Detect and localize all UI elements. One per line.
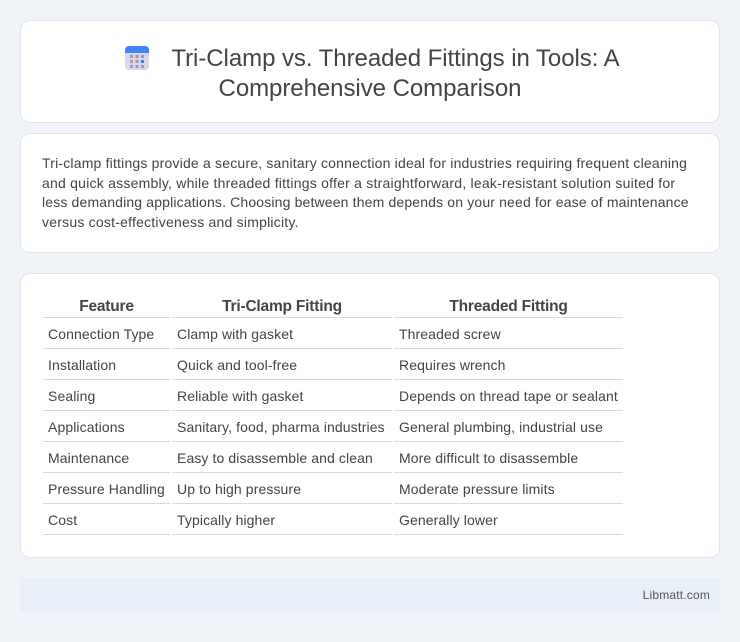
comparison table: Reliable with gasket	[177, 388, 304, 404]
comparison table	[43, 298, 623, 535]
intro text panel	[20, 133, 720, 253]
comparison table: Pressure Handling	[48, 481, 165, 497]
comparison table: Sealing	[48, 388, 95, 404]
comparison table: Moderate pressure limits	[399, 481, 555, 497]
comparison table: Threaded screw	[399, 326, 501, 342]
comparison table: Clamp with gasket	[177, 326, 293, 342]
comparison table: Connection Type	[48, 326, 154, 342]
title	[171, 45, 620, 102]
title: Comprehensive Comparison	[219, 75, 521, 102]
comparison table: Applications	[48, 419, 125, 435]
comparison table: Depends on thread tape or sealant	[399, 388, 618, 404]
footer text: Libmatt.com	[643, 588, 710, 602]
intro text	[42, 155, 689, 230]
comparison table: Easy to disassemble and clean	[177, 450, 373, 466]
comparison table: Installation	[48, 357, 116, 373]
table header	[79, 298, 568, 315]
comparison table: Feature	[79, 298, 134, 315]
intro text: and quick assembly, while threaded fittings offer a straightforward, leak-resistant solution suited for	[42, 174, 675, 190]
comparison table: More difficult to disassemble	[399, 450, 578, 466]
icon: calendar	[125, 46, 149, 70]
intro text: Tri-clamp fittings provide a secure, sanitary connection ideal for industries requiring frequent cleaning	[42, 155, 687, 171]
comparison table: Quick and tool-free	[177, 357, 297, 373]
comparison table: Generally lower	[399, 512, 498, 528]
comparison table: Sanitary, food, pharma industries	[177, 419, 385, 435]
table panel	[20, 273, 720, 558]
title: Tri-Clamp vs. Threaded Fittings in Tools: A	[171, 45, 620, 72]
comparison table: Typically higher	[177, 512, 275, 528]
comparison table: Tri-Clamp Fitting	[222, 298, 342, 315]
comparison table: Threaded Fitting	[449, 298, 568, 315]
comparison table: General plumbing, industrial use	[399, 419, 603, 435]
comparison table: Maintenance	[48, 450, 129, 466]
intro text: versus cost-effectiveness and simplicity.	[42, 214, 299, 230]
footer bar	[20, 578, 720, 612]
intro text: less demanding applications. Choosing between them depends on your need for ease of maintenance	[42, 194, 689, 210]
comparison table: Requires wrench	[399, 357, 506, 373]
header panel	[20, 20, 720, 123]
comparison table: Cost	[48, 512, 77, 528]
comparison table: Up to high pressure	[177, 481, 301, 497]
